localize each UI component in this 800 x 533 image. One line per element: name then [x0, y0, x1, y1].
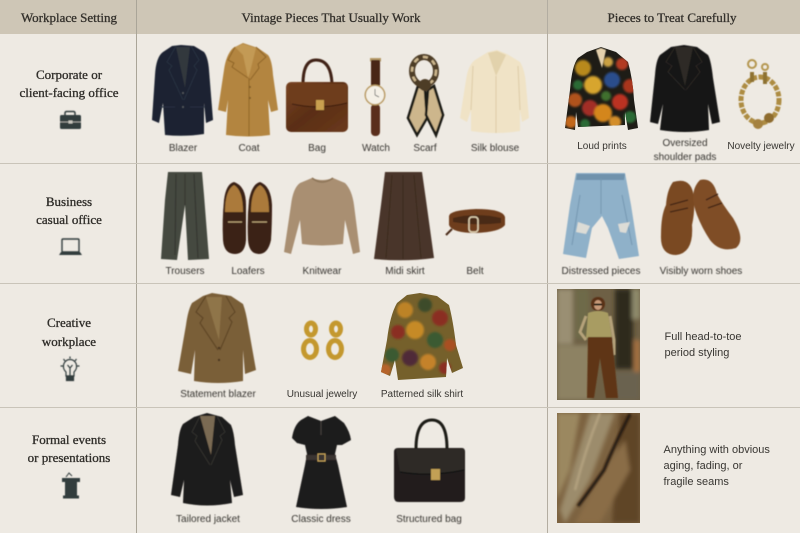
- table header band: [0, 0, 800, 34]
- heading: pieces to treat carefully: Pieces to Treat Carefully: [608, 10, 737, 25]
- icon: briefcase: [60, 112, 81, 129]
- heading: workplace setting: Workplace Setting: [21, 10, 118, 25]
- photo: full head-to-toe period styling: [557, 289, 640, 400]
- caption: Knitwear: [303, 266, 342, 277]
- caption: Silk blouse: [471, 143, 520, 154]
- heading: vintage pieces that usually work: Vintage Pieces That Usually Work: [242, 10, 421, 25]
- item: scarf: [408, 57, 443, 154]
- item: loafers: [223, 182, 272, 277]
- caption: shoulder pads: [654, 152, 716, 163]
- caption: Statement blazer: [180, 389, 256, 400]
- item: loud prints: [565, 47, 638, 151]
- row label: creative workplace: Creative: [47, 315, 91, 330]
- caption: Trousers: [165, 266, 205, 277]
- item: unusual jewelry earrings: [304, 323, 342, 358]
- row label: formal events or presentations: or presentations: [28, 450, 110, 465]
- caption: Tailored jacket: [176, 514, 240, 525]
- item: blazer: [152, 45, 213, 154]
- item: novelty jewelry necklace: [727, 60, 795, 152]
- item: statement blazer: [178, 293, 256, 400]
- caption: full head-to-toe period styling: period styling: [664, 347, 729, 359]
- caption: unusual jewelry: Unusual jewelry: [287, 389, 357, 400]
- item: patterned silk shirt: [381, 293, 464, 397]
- caption: Oversized: [662, 138, 708, 149]
- item: visibly worn shoes: [660, 180, 742, 277]
- row label: corporate or client-facing office: client-facing office: [19, 85, 119, 100]
- caption: full head-to-toe period styling: Full head-to-toe: [664, 331, 742, 343]
- caption: Scarf: [413, 143, 437, 154]
- item: midi skirt: [374, 172, 434, 277]
- item: trousers: [161, 172, 209, 277]
- icon: light bulb: [60, 356, 80, 380]
- icon: laptop: [59, 239, 82, 255]
- caption: Bag: [308, 143, 326, 154]
- caption: Structured bag: [396, 514, 462, 525]
- photo: aged fabric texture: [557, 413, 640, 523]
- caption: Belt: [466, 266, 484, 277]
- item: watch: [362, 58, 390, 154]
- caption: Classic dress: [291, 514, 351, 525]
- item: oversized shoulder pads blazer: [650, 45, 720, 163]
- row label: formal events or presentations: Formal events: [32, 432, 106, 447]
- item: distressed jeans: [562, 173, 640, 277]
- item: knitwear: [284, 178, 360, 277]
- item: coat: [218, 43, 278, 154]
- row label: creative workplace: workplace: [42, 334, 96, 349]
- row label: business casual office: casual office: [36, 212, 102, 227]
- item: classic dress: [291, 416, 351, 525]
- item: structured bag: [394, 420, 465, 525]
- caption: Novelty jewelry: [727, 141, 795, 152]
- caption: Distressed pieces: [562, 266, 640, 277]
- caption: Blazer: [169, 143, 198, 154]
- caption: Loud prints: [577, 141, 627, 152]
- caption: Midi skirt: [385, 266, 425, 277]
- item: belt: [446, 209, 505, 277]
- row label: corporate or client-facing office: Corporate or: [36, 67, 103, 82]
- item: bag: [286, 60, 348, 154]
- caption: Loafers: [231, 266, 265, 277]
- caption: Visibly worn shoes: [660, 266, 742, 277]
- caption: Coat: [238, 143, 260, 154]
- item: tailored jacket: [171, 413, 243, 525]
- caption: anything with obvious aging: fragile seams: [664, 476, 729, 488]
- caption: Patterned silk shirt: [381, 389, 463, 400]
- icon: lectern: [62, 473, 80, 498]
- caption: Watch: [362, 143, 390, 154]
- row label: business casual office: Business: [46, 194, 92, 209]
- item: silk blouse: [460, 50, 529, 154]
- caption: anything with obvious aging: Anything with obvious: [664, 444, 770, 456]
- caption: anything with obvious aging: aging, fading, or: [664, 460, 743, 472]
